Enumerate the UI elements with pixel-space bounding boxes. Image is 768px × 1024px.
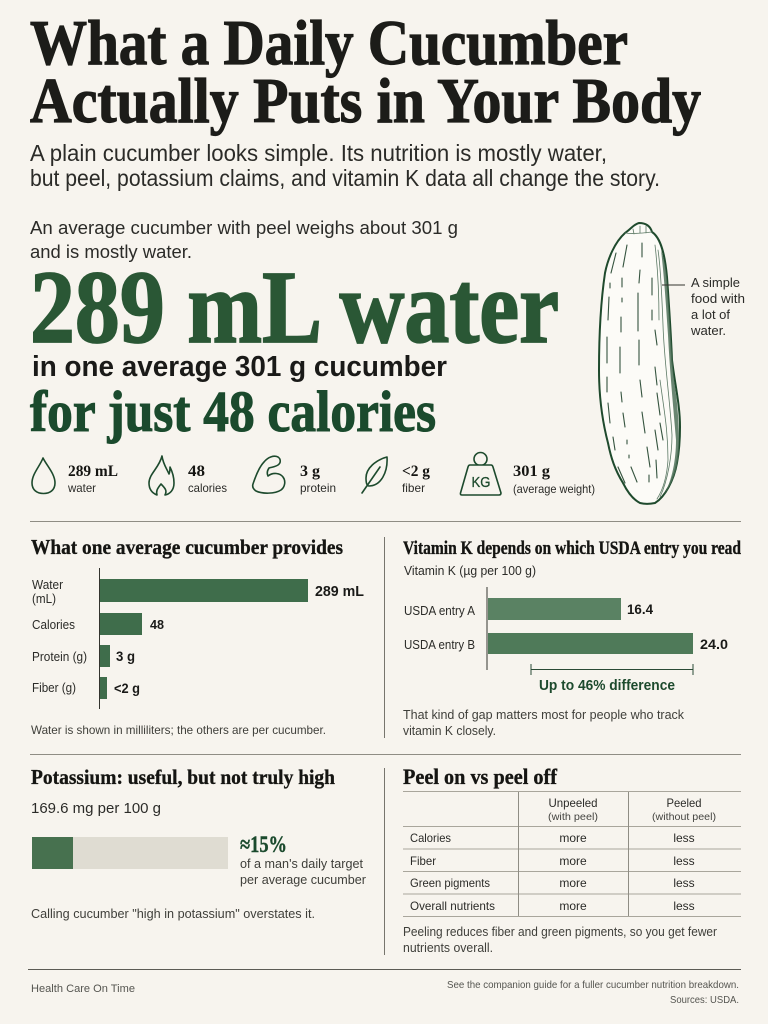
icon: leaf	[362, 457, 387, 493]
comparison table: less	[673, 899, 695, 913]
stat: water: 289 mL	[68, 463, 118, 480]
note: Water is shown in milliliters; the others are per cucumber.	[31, 723, 326, 737]
title: What a Daily Cucumber	[30, 7, 628, 78]
footer: sources: Sources: USDA.	[670, 994, 739, 1006]
skin dashes	[607, 243, 663, 483]
subtitle	[30, 140, 660, 191]
hero number: 289 mL water	[30, 250, 559, 365]
calories line: for just 48 calories	[30, 379, 436, 444]
bar chart: Calories	[32, 618, 75, 632]
stat: calories: 48	[188, 463, 205, 480]
heading: What one average cucumber provides	[31, 535, 343, 559]
comparison table: Calories	[410, 831, 451, 845]
comparison table: Overall nutrients	[410, 899, 495, 913]
stat: water	[32, 458, 118, 495]
comparison table: more	[559, 899, 587, 913]
comparison table: more	[559, 876, 587, 890]
stat: fiber: <2 g	[402, 463, 430, 480]
panel: peel on vs peel off	[403, 764, 741, 955]
intro text: and is mostly water.	[30, 241, 192, 262]
heading: Potassium: useful, but not truly high	[31, 765, 335, 789]
footer: brand: Health Care On Time	[31, 983, 135, 995]
note: Calling cucumber "high in potassium" overstates it.	[31, 907, 315, 921]
comparison table: Peeled	[666, 796, 702, 810]
subtitle: but peel, potassium claims, and vitamin K data all change the story.	[30, 165, 660, 191]
panel: what one average cucumber provides	[31, 535, 364, 737]
bar chart	[32, 568, 364, 709]
stat: fiber	[362, 457, 430, 495]
icon: kilogram weight: KG	[472, 474, 490, 491]
stat: water: water	[67, 481, 96, 495]
callout: simple food: A simple	[691, 276, 740, 290]
bar chart: 16.4	[627, 601, 653, 617]
bar chart: USDA entry B	[404, 638, 475, 652]
comparison table	[403, 792, 741, 916]
bar chart: 48	[150, 617, 164, 632]
title: Actually Puts in Your Body	[30, 65, 701, 136]
intro text	[30, 217, 458, 262]
stat: calories: calories	[188, 481, 227, 495]
bar chart: (mL)	[32, 592, 56, 606]
title	[30, 7, 701, 136]
subtitle: A plain cucumber looks simple. Its nutrition is mostly water,	[30, 140, 607, 166]
comparison table: (without peel)	[652, 811, 716, 823]
bar chart	[404, 587, 728, 670]
difference label: Up to 46% difference	[539, 678, 675, 694]
percent callout: of a man's daily target	[240, 857, 364, 871]
icon: water drop	[32, 458, 55, 494]
stat: weight: (average weight)	[513, 482, 595, 496]
comparison table: less	[673, 831, 695, 845]
note: Peeling reduces fiber and green pigments, so you get fewer	[403, 925, 717, 939]
icon: flexed arm	[253, 456, 285, 493]
stat: weight	[460, 452, 595, 496]
progress bar	[32, 837, 228, 869]
range bracket	[531, 664, 693, 675]
panel: potassium	[31, 765, 366, 921]
comparison table: less	[673, 854, 695, 868]
bar chart: 3 g	[116, 648, 135, 664]
stat: protein	[253, 456, 336, 495]
callout: simple food: food with	[691, 292, 745, 306]
percent callout: per average cucumber	[240, 873, 366, 887]
footer: sources: See the companion guide for a fuller cucumber nutrition breakdown.	[447, 979, 739, 991]
bar chart: Fiber (g)	[32, 681, 76, 695]
note: vitamin K closely.	[403, 724, 496, 738]
panel: vitamin K	[403, 539, 742, 738]
callout: simple food: water.	[690, 324, 726, 338]
stat: protein: protein	[300, 481, 336, 495]
intro text: An average cucumber with peel weighs about 301 g	[30, 217, 458, 238]
stat: fiber: fiber	[402, 481, 425, 495]
heading: Peel on vs peel off	[403, 764, 557, 789]
percent callout: ≈15%	[240, 832, 287, 857]
comparison table: Fiber	[410, 854, 436, 868]
value: 169.6 mg per 100 g	[31, 801, 161, 817]
bar chart: 289 mL	[315, 584, 364, 600]
footer: sources	[447, 979, 739, 1006]
bar chart: <2 g	[114, 680, 140, 696]
axis label: Vitamin K (µg per 100 g)	[404, 564, 536, 578]
comparison table: (with peel)	[548, 811, 598, 823]
stat: protein: 3 g	[300, 463, 320, 480]
comparison table: Green pigments	[410, 876, 490, 890]
percent callout	[240, 832, 366, 887]
callout: simple food: a lot of	[691, 308, 731, 322]
illustration: cucumber	[599, 223, 680, 504]
comparison table: more	[559, 831, 587, 845]
icon: flame	[149, 456, 174, 495]
comparison table: less	[673, 876, 695, 890]
shaded right side	[661, 250, 679, 495]
bar chart: USDA entry A	[404, 604, 476, 618]
comparison table: more	[559, 854, 587, 868]
hero subline: in one average 301 g cucumber	[32, 351, 447, 383]
note	[403, 708, 685, 738]
note: That kind of gap matters most for people who track	[403, 708, 685, 722]
stat: calories	[149, 456, 227, 495]
stat: weight: 301 g	[513, 463, 550, 480]
callout: simple food	[662, 276, 745, 338]
note	[403, 925, 717, 955]
note: nutrients overall.	[403, 941, 493, 955]
bar chart: Water	[32, 578, 63, 592]
bar chart: Protein (g)	[32, 650, 87, 664]
bar chart: 24.0	[700, 636, 728, 652]
comparison table: Unpeeled	[548, 796, 598, 810]
